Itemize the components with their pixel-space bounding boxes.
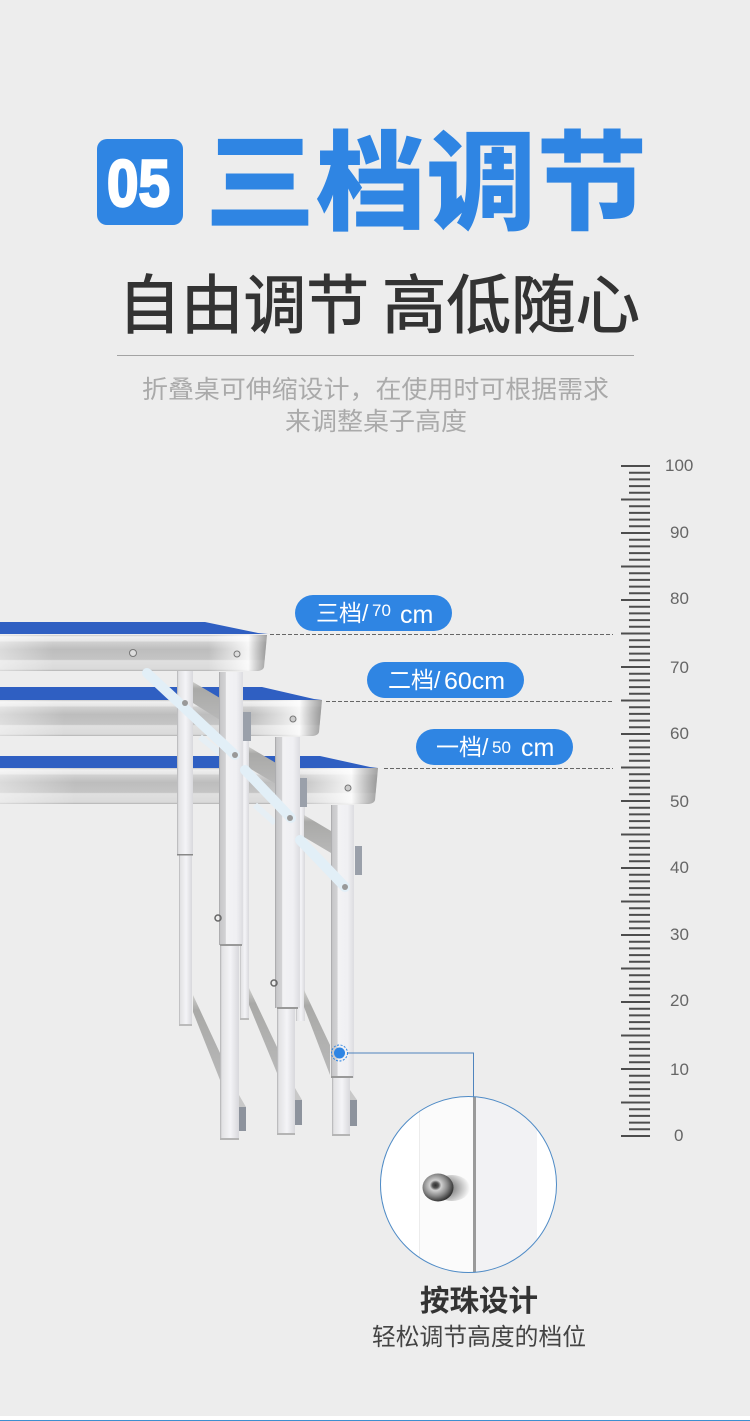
strut screws (182, 700, 293, 821)
ruler numbers: 30 (670, 925, 689, 944)
pill: level 3: 三档/ (316, 600, 369, 626)
pill: level 1: 一档/ (436, 734, 489, 760)
push bead (215, 915, 221, 921)
pill: level 3: 70 (372, 601, 391, 620)
ruler numbers: 70 (670, 658, 689, 677)
table: highest setting (0, 622, 293, 1140)
ruler numbers: 10 (670, 1060, 689, 1079)
pill: level 3: cm (400, 601, 433, 629)
pill: level 2 (367, 662, 524, 698)
under strut (200, 737, 220, 753)
foot link (295, 1088, 302, 1100)
ruler numbers: 100 (665, 456, 693, 475)
rear leg (296, 806, 305, 1021)
under strut (255, 805, 275, 823)
ruler numbers: 60 (670, 724, 689, 743)
ruler numbers: 20 (670, 991, 689, 1010)
pill: level 2: 60cm (444, 668, 505, 695)
description: 折叠桌可伸缩设计，在使用时可根据需求 (142, 376, 609, 404)
number badge 05: 05 (107, 146, 170, 220)
ruler numbers: 50 (670, 792, 689, 811)
foot link (239, 1095, 246, 1107)
foot (295, 1100, 302, 1125)
subtitle: 高低随心 (382, 270, 640, 342)
hotspot marker (332, 1045, 348, 1061)
front leg lower (277, 1008, 295, 1135)
divider (117, 355, 634, 356)
bead shadow (445, 1175, 468, 1201)
pill: level 3 (295, 595, 452, 631)
front leg lower (332, 1078, 350, 1136)
subtitle (118, 270, 640, 342)
ruler numbers (665, 456, 693, 1145)
cross bar (193, 682, 220, 720)
callout connector (347, 1053, 474, 1097)
strut (300, 840, 345, 887)
pill: level 1: 50 (492, 738, 511, 757)
table: lowest setting (0, 756, 378, 1136)
cross bar (249, 747, 276, 784)
table: middle setting (0, 687, 348, 1135)
dashed guide lines (270, 634, 613, 768)
bottom strip (0, 1416, 750, 1421)
lower brace (193, 995, 220, 1080)
side clip (243, 712, 251, 741)
bead (422, 1174, 454, 1202)
push bead (271, 980, 277, 986)
side clip (300, 778, 307, 807)
subtitle: 自由调节 (118, 270, 369, 342)
ruler numbers: 40 (670, 858, 689, 877)
lower brace (304, 990, 330, 1075)
ruler numbers: 90 (670, 523, 689, 542)
ruler numbers: 0 (674, 1126, 683, 1145)
description: 来调整桌子高度 (285, 408, 467, 436)
pill: level 2: 二档/ (388, 667, 441, 693)
lower brace (249, 988, 277, 1073)
side clip (355, 846, 362, 875)
description (142, 376, 609, 436)
ruler numbers: 80 (670, 589, 689, 608)
pill: level 1: cm (521, 734, 554, 762)
struts (147, 673, 291, 818)
front leg upper (219, 672, 243, 945)
front leg upper (275, 737, 300, 1008)
height ruler (625, 456, 693, 1145)
detail heading: 按珠设计 (420, 1285, 538, 1318)
front leg lower (220, 945, 239, 1140)
foot link (350, 1090, 357, 1100)
front leg upper (331, 805, 354, 1078)
detail circle: push bead (380, 1096, 556, 1273)
foot (350, 1100, 357, 1126)
detail caption: 轻松调节高度的档位 (372, 1324, 586, 1351)
cross bar (304, 815, 331, 853)
pill: level 1 (416, 729, 573, 765)
rear leg (240, 738, 249, 1020)
title: 三档调节 (205, 123, 647, 244)
frame screws (130, 650, 240, 657)
rear leg (179, 855, 192, 1026)
foot (239, 1107, 246, 1131)
